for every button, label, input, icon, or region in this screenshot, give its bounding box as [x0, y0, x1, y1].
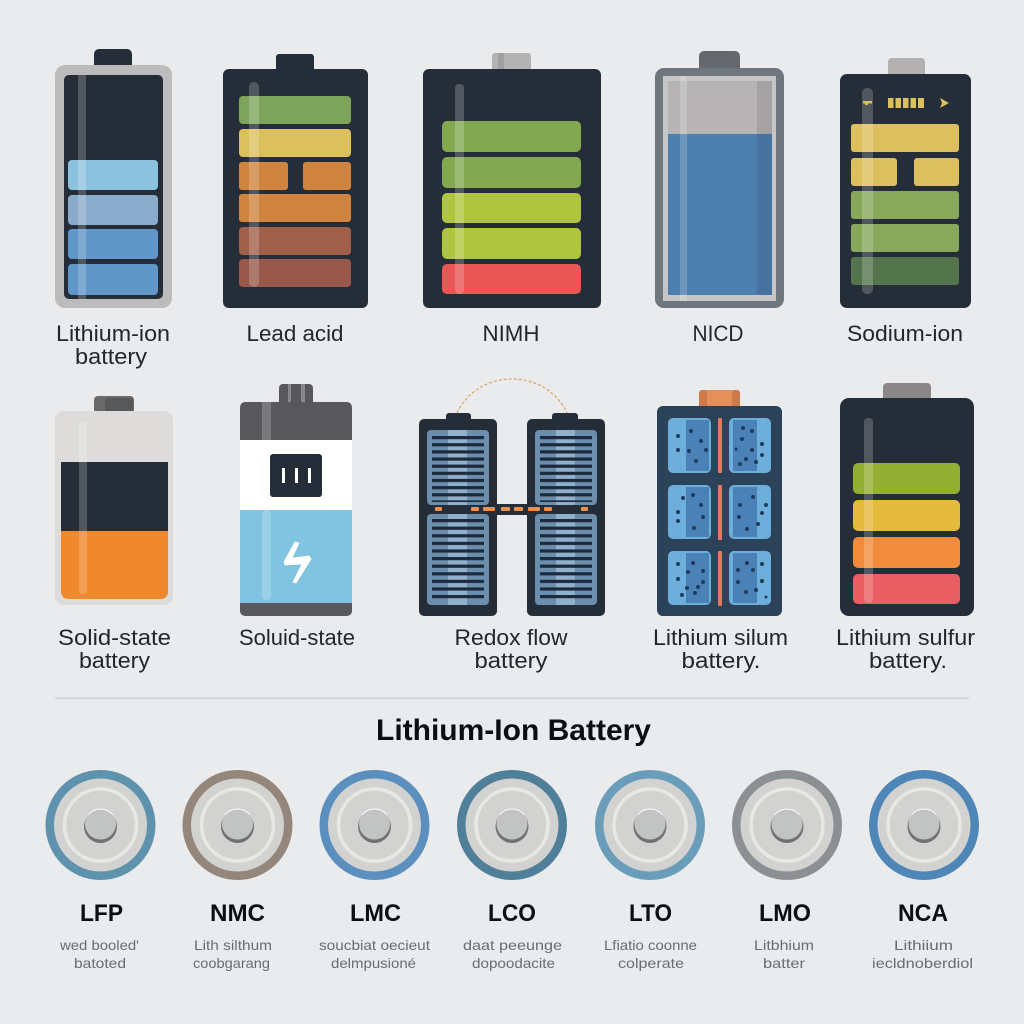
cell: LCO — [457, 770, 567, 880]
description: LMC: delmpusioné — [331, 955, 416, 971]
description: LMO — [754, 937, 814, 971]
battery: lithium sulfur — [840, 383, 974, 616]
description: LFP — [59, 937, 139, 971]
description: LMO: Litbhium — [754, 937, 814, 953]
code: LFP: LFP — [80, 900, 123, 927]
membrane dashes — [435, 507, 588, 511]
code: NMC: NMC — [210, 900, 265, 927]
label: NiCd: NICD — [692, 321, 744, 346]
label: redox flow battery — [454, 625, 568, 673]
description: LCO: dopoodacite — [472, 955, 555, 971]
label: lead acid: Lead acid — [246, 321, 344, 346]
label: lithium sulfur battery: battery. — [869, 648, 947, 673]
battery: NiMH — [423, 53, 601, 308]
label: redox flow battery: Redox flow — [454, 625, 568, 650]
battery: lithium silum — [657, 390, 782, 616]
battery: solid-state 2 — [240, 384, 352, 616]
battery: solid-state 1 — [55, 396, 173, 605]
icon: status indicators — [863, 98, 949, 108]
label: solid-state battery: battery — [79, 648, 150, 673]
description: LTO: colperate — [618, 955, 684, 971]
particles — [676, 426, 768, 598]
battery: redox flow — [419, 379, 605, 616]
code: LMO: LMO — [759, 900, 811, 927]
separators — [718, 418, 722, 606]
cell: NCA — [869, 770, 979, 880]
description: LCO: daat peeunge — [463, 937, 562, 953]
label: lithium sulfur battery — [836, 625, 975, 673]
description: NCA — [872, 937, 973, 971]
cell: LTO — [595, 770, 705, 880]
description: LCO — [463, 937, 562, 971]
label: solid-state: Soluid-state — [239, 625, 355, 650]
battery: sodium-ion — [840, 58, 971, 308]
cell: LFP — [46, 770, 156, 880]
cell: LMC — [320, 770, 430, 880]
label: redox flow battery: battery — [474, 648, 548, 673]
description: LMC — [319, 937, 430, 971]
description: NCA: iecldnoberdiol — [872, 955, 973, 971]
label: lithium sulfur battery: Lithium sulfur — [836, 625, 975, 650]
cell: NMC — [182, 770, 292, 880]
connector arc — [457, 379, 567, 413]
code: LMC: LMC — [350, 900, 401, 927]
label: lithium silum battery: battery. — [682, 648, 760, 673]
label: lithium silum battery: Lithium silum — [653, 625, 788, 650]
description: NCA: Lithiium — [894, 937, 953, 953]
code: LTO: LTO — [629, 900, 672, 927]
label: sodium-ion: Sodium-ion — [847, 321, 963, 346]
battery: lithium-ion — [55, 49, 172, 308]
label: lithium-ion battery — [56, 321, 170, 369]
description: NMC — [193, 937, 272, 971]
label: NiMH: NIMH — [482, 321, 540, 346]
label: lithium-ion battery: Lithium-ion — [56, 321, 170, 346]
battery: lead acid — [223, 54, 368, 308]
description: NMC: Lith silthum — [194, 937, 272, 953]
description: LMO: batter — [763, 955, 805, 971]
description: LFP: wed booled' — [59, 937, 139, 953]
cells — [668, 418, 771, 605]
code: NCA: NCA — [898, 900, 948, 927]
description: LMC: soucbiat oecieut — [319, 937, 430, 953]
description: LTO — [604, 937, 697, 971]
label: solid-state battery: Solid-state — [58, 625, 171, 650]
stack panels — [427, 430, 597, 605]
label: lithium-ion battery: battery — [75, 344, 147, 369]
battery: NiCd — [655, 51, 784, 308]
description: NMC: coobgarang — [193, 955, 270, 971]
description: LTO: Lfiatio coonne — [604, 937, 697, 953]
cell: LMO — [732, 770, 842, 880]
icon: lightning bolt — [284, 542, 311, 583]
code: LCO: LCO — [488, 900, 536, 927]
label: solid-state battery — [58, 625, 171, 673]
icon: chip — [270, 454, 322, 497]
description: LFP: batoted — [74, 955, 126, 971]
label: lithium silum battery — [653, 625, 788, 673]
section title: Lithium-Ion Battery — [376, 714, 651, 747]
